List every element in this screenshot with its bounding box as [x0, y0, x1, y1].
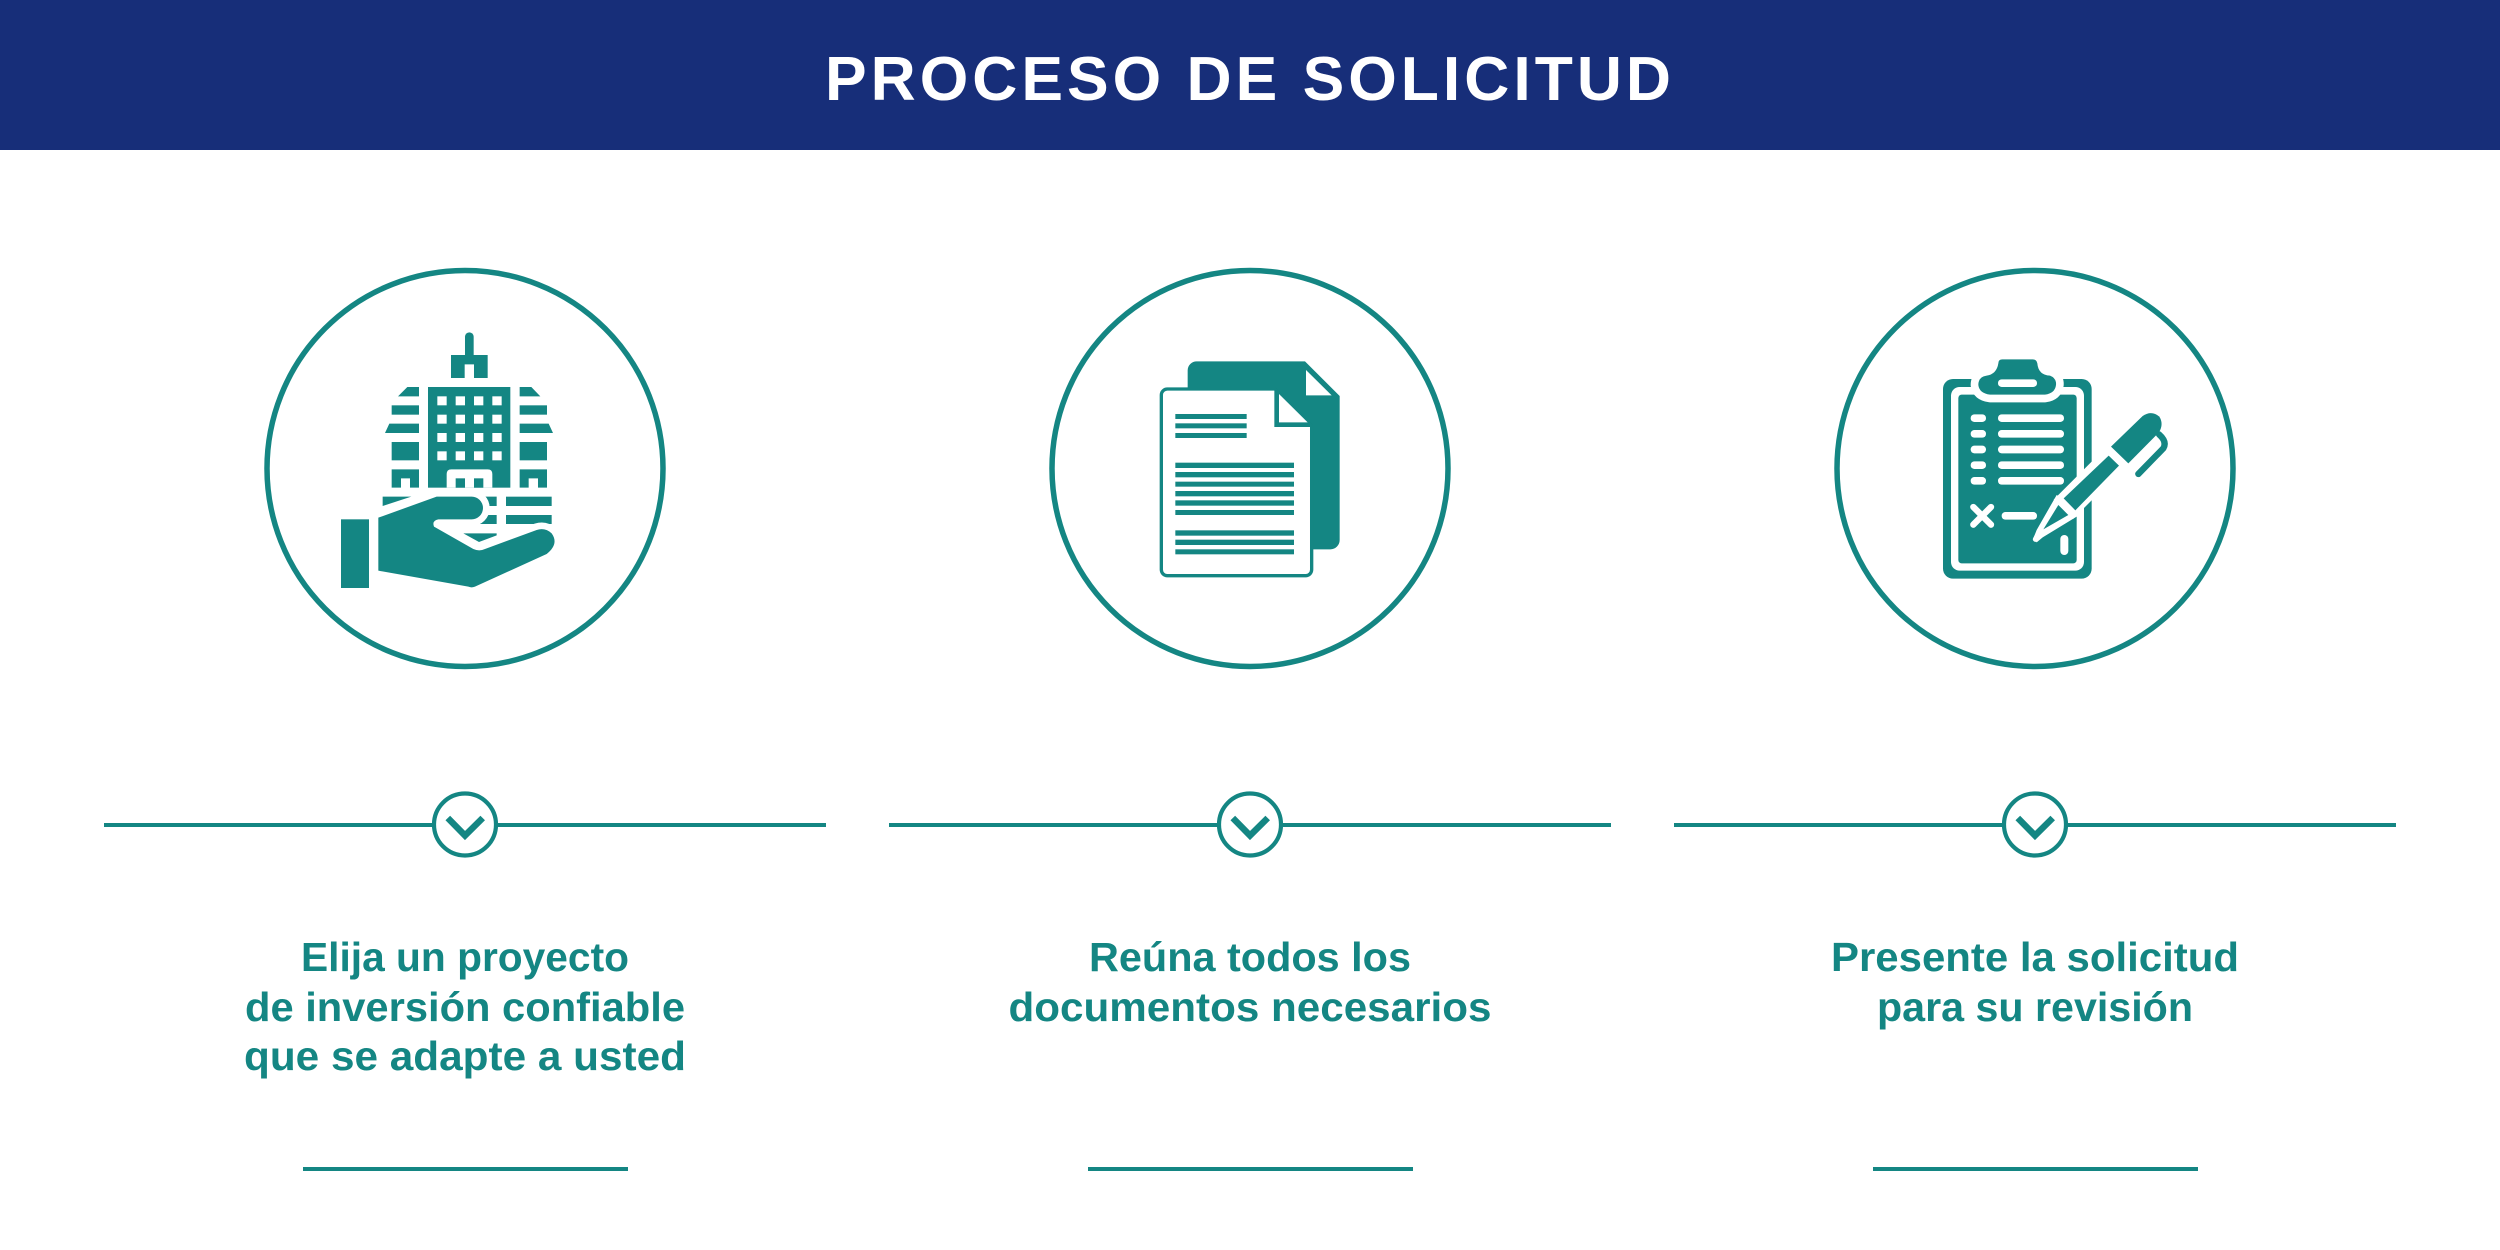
- step 3 text: [1831, 934, 2239, 1030]
- timeline 3: [1674, 794, 2396, 856]
- panel: step 2 gather documents: [889, 270, 1611, 1171]
- icon circle 2: [1052, 270, 1448, 666]
- step 1 text: de inversión confiable: [245, 984, 685, 1030]
- timeline 1: [104, 794, 826, 856]
- icon: clipboard and pen: [1943, 359, 2165, 579]
- bottom rule 3: [1873, 1167, 2198, 1171]
- step 3 text: para su revisión: [1877, 984, 2193, 1030]
- step 1 text: Elija un proyecto: [301, 934, 629, 980]
- panel: step 1 choose project: [104, 270, 826, 1171]
- step 2 text: [1008, 934, 1492, 1030]
- step 1 text: [244, 934, 686, 1079]
- panel: step 3 submit application: [1674, 270, 2396, 1171]
- header banner: [0, 0, 2500, 150]
- step 1 text: que se adapte a usted: [244, 1033, 686, 1079]
- bottom rule 1: [303, 1167, 628, 1171]
- icon: documents: [1161, 361, 1340, 576]
- title: PROCESO DE SOLICITUD: [825, 45, 1675, 114]
- icon circle 3: [1837, 270, 2233, 666]
- step 2 text: documentos necesarios: [1008, 984, 1492, 1030]
- icon: building held by hand: [341, 332, 555, 588]
- icon circle 1: [267, 270, 663, 666]
- timeline 2: [889, 794, 1611, 856]
- step 2 text: Reúna todos los: [1089, 934, 1411, 980]
- bottom rule 2: [1088, 1167, 1413, 1171]
- step 3 text: Presente la solicitud: [1831, 934, 2239, 980]
